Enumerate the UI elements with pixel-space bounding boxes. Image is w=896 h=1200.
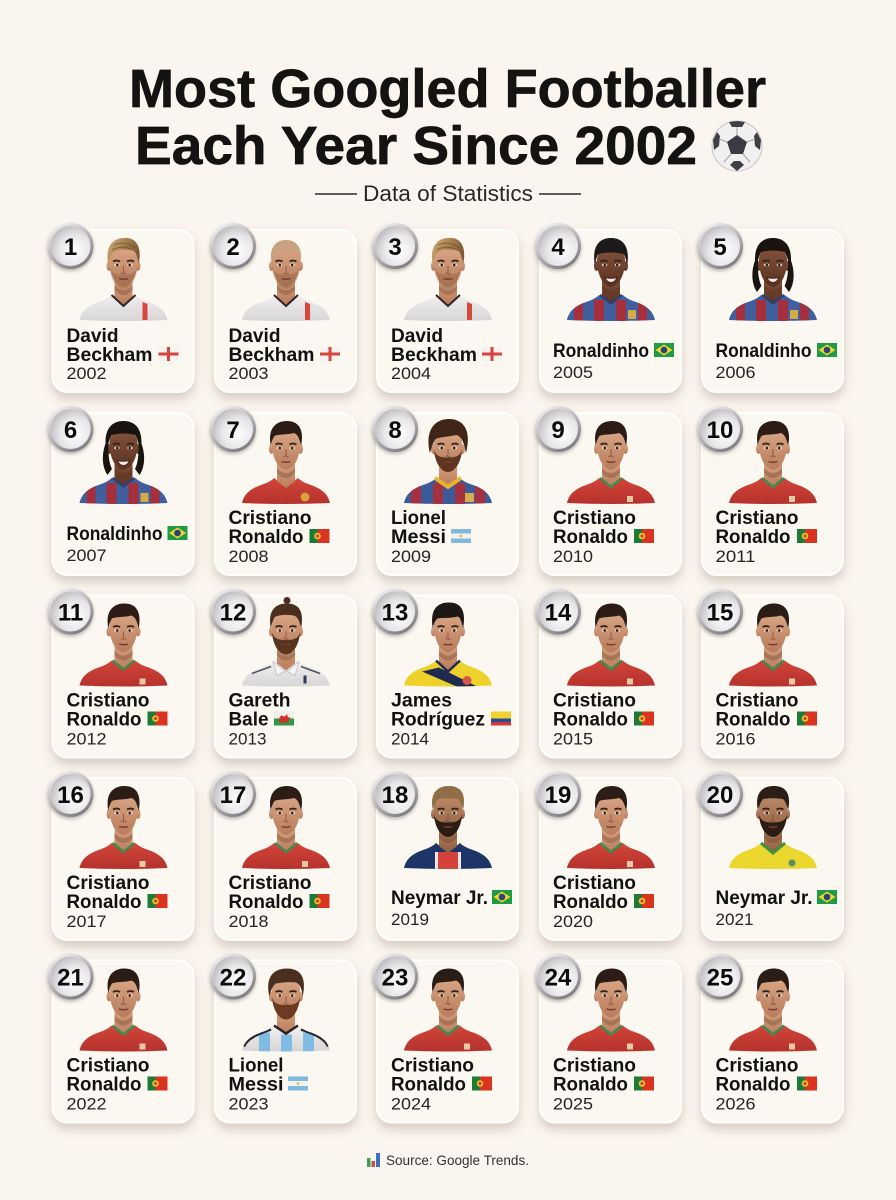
rank badge (372, 588, 418, 634)
card 9: Cristiano Ronaldo 2010 (535, 406, 681, 575)
flag: Brazil (168, 526, 188, 540)
year: 2022 (66, 1094, 106, 1114)
year: 2003 (228, 364, 268, 383)
flag: Portugal (634, 712, 654, 726)
card 11: Cristiano Ronaldo 2012 (48, 588, 194, 758)
title: Most Googled Footballer (129, 59, 766, 119)
name: Neymar Jr. (716, 887, 812, 909)
portrait (404, 602, 492, 688)
flag: Portugal (148, 1076, 168, 1090)
rank badge: 16 (57, 782, 84, 809)
flag: England (320, 347, 340, 361)
card 25: Cristiano Ronaldo 2026 (697, 954, 843, 1122)
year: 2014 (391, 730, 429, 748)
name: David (66, 325, 118, 347)
rank badge (697, 771, 743, 817)
rank badge (535, 954, 581, 1000)
name: Lionel (391, 507, 446, 529)
year: 2007 (66, 546, 106, 565)
name (228, 872, 312, 913)
rank badge: 11 (58, 600, 83, 626)
name: Ronaldo (66, 708, 142, 730)
rank badge: 4 (551, 234, 565, 261)
rank badge (48, 223, 94, 269)
name (716, 1054, 799, 1096)
rank badge: 9 (551, 417, 565, 444)
flag: England (482, 347, 502, 361)
icon: bar chart (367, 1153, 380, 1167)
portrait (567, 786, 655, 869)
portrait (729, 786, 817, 869)
year: 2002 (66, 364, 106, 383)
name: Ronaldo (553, 708, 628, 730)
year: 2005 (553, 363, 593, 382)
name (66, 1054, 150, 1096)
rank badge: 24 (545, 964, 572, 992)
rank badge (48, 406, 94, 452)
rank badge: 6 (64, 417, 77, 444)
flag: Portugal (797, 712, 817, 726)
name (391, 507, 446, 548)
rank badge (372, 223, 418, 269)
year: 2019 (391, 910, 429, 929)
name: David (228, 325, 280, 347)
name: Rodríguez (391, 708, 485, 730)
name (391, 690, 485, 730)
card 22: Lionel Messi 2023 (210, 954, 356, 1122)
portrait (567, 968, 655, 1052)
name: Cristiano (228, 872, 312, 894)
year: 2010 (553, 547, 593, 566)
card 12: Gareth Bale 2013 (210, 588, 356, 758)
flag: Colombia (491, 712, 511, 726)
rank badge: 25 (707, 964, 733, 992)
name: Ronaldinho (553, 340, 649, 362)
name: Neymar Jr. (391, 887, 488, 909)
rank badge: 18 (382, 782, 408, 809)
year: 2016 (716, 730, 756, 748)
year: 2020 (553, 912, 593, 931)
rank badge: 12 (220, 600, 246, 626)
year: 2026 (716, 1094, 756, 1114)
portrait (242, 597, 330, 686)
rank badge (210, 223, 256, 269)
year: 2006 (716, 363, 756, 382)
card 10: Cristiano Ronaldo 2011 (697, 406, 843, 575)
flag: Argentina (288, 1076, 308, 1090)
name: Lionel (228, 1054, 284, 1076)
rank badge: 17 (220, 782, 246, 809)
card 15: Cristiano Ronaldo 2016 (697, 588, 843, 758)
name (553, 690, 636, 730)
portrait (242, 968, 330, 1054)
name (66, 872, 150, 913)
name: Ronaldo (228, 526, 304, 548)
card 17: Cristiano Ronaldo 2018 (210, 771, 356, 940)
name: Ronaldo (391, 1074, 466, 1096)
card 1: David Beckham 2002 (48, 223, 194, 392)
year: 2009 (391, 547, 431, 566)
name: Cristiano (66, 690, 150, 712)
portrait (729, 421, 817, 504)
rank badge (210, 954, 256, 1000)
name: Cristiano (391, 1054, 474, 1076)
name: Cristiano (553, 690, 636, 712)
portrait (404, 238, 492, 321)
name (66, 690, 150, 730)
portrait (242, 421, 330, 504)
name: Cristiano (553, 872, 636, 894)
rank badge (372, 771, 418, 817)
rank badge: 20 (707, 782, 733, 809)
portrait (567, 238, 655, 324)
name (553, 1054, 636, 1096)
name (716, 507, 799, 548)
rank badge (535, 406, 581, 452)
card 2: David Beckham 2003 (210, 223, 356, 392)
flag: Portugal (634, 894, 654, 908)
rank badge (210, 406, 256, 452)
card 23: Cristiano Ronaldo 2024 (372, 954, 518, 1122)
card 21: Cristiano Ronaldo 2022 (48, 954, 194, 1122)
card 6: Ronaldinho 2007 (48, 406, 194, 575)
rank badge (535, 223, 581, 269)
rank badge (697, 588, 743, 634)
year: 2021 (716, 910, 754, 929)
subtitle: Data of Statistics (363, 181, 533, 206)
card 14: Cristiano Ronaldo 2015 (535, 588, 681, 758)
flag: Portugal (472, 1076, 492, 1090)
name: Ronaldo (553, 526, 628, 548)
name: Ronaldo (66, 891, 142, 913)
portrait (567, 421, 655, 504)
portrait (80, 604, 168, 686)
card 19: Cristiano Ronaldo 2020 (535, 771, 681, 940)
rank badge: 3 (388, 234, 402, 261)
name: David (391, 325, 443, 347)
name: Beckham (66, 344, 152, 366)
rank badge: 22 (220, 964, 246, 992)
portrait (80, 238, 168, 321)
portrait (567, 604, 655, 686)
card 7: Cristiano Ronaldo 2008 (210, 406, 356, 575)
rank badge: 2 (226, 234, 240, 261)
rank badge (697, 223, 743, 269)
flag: Argentina (451, 529, 471, 543)
name: Cristiano (553, 507, 636, 529)
name: Gareth (228, 690, 290, 712)
name: Bale (228, 708, 269, 730)
rank badge: 10 (707, 417, 733, 444)
card 20: Neymar Jr. 2021 (697, 771, 843, 940)
name: Ronaldo (553, 891, 628, 913)
year: 2018 (228, 912, 268, 931)
portrait (729, 604, 817, 686)
flag: Brazil (492, 890, 512, 904)
name: Messi (391, 526, 446, 548)
name: Cristiano (66, 872, 150, 894)
portrait (242, 786, 330, 869)
card 4: Ronaldinho 2005 (535, 223, 681, 392)
name (228, 507, 312, 548)
name (391, 325, 477, 366)
card 24: Cristiano Ronaldo 2025 (535, 954, 681, 1122)
rank badge: 13 (382, 600, 408, 626)
name: Ronaldo (716, 1074, 791, 1096)
portrait (80, 968, 168, 1052)
rank badge: 15 (707, 600, 733, 626)
year: 2015 (553, 730, 593, 748)
name: Beckham (391, 344, 477, 366)
year: 2023 (228, 1094, 268, 1114)
flag: Portugal (634, 1076, 654, 1090)
name: Ronaldinho (66, 523, 163, 545)
card 8: Lionel Messi 2009 (372, 406, 518, 575)
name: James (391, 690, 452, 712)
name (553, 507, 636, 548)
portrait (80, 421, 168, 507)
year: 2008 (228, 547, 268, 566)
portrait (80, 786, 168, 869)
name: Cristiano (228, 507, 312, 529)
year: 2004 (391, 364, 431, 383)
card 18: Neymar Jr. 2019 (372, 771, 518, 940)
name: Cristiano (66, 1054, 150, 1076)
name: Ronaldo (716, 526, 791, 548)
year: 2012 (66, 730, 106, 748)
rank badge (535, 771, 581, 817)
flag: Brazil (817, 890, 837, 904)
rank badge (372, 406, 418, 452)
name: Ronaldo (228, 891, 304, 913)
name: Beckham (228, 344, 314, 366)
card 5: Ronaldinho 2006 (697, 223, 843, 392)
flag: Wales (274, 712, 294, 726)
card 13: James Rodríguez 2014 (372, 588, 518, 758)
rank badge (697, 406, 743, 452)
portrait (404, 419, 492, 507)
card 16: Cristiano Ronaldo 2017 (48, 771, 194, 940)
name: Ronaldinho (716, 340, 812, 362)
portrait (404, 968, 492, 1052)
name (228, 690, 290, 730)
flag: Portugal (634, 529, 654, 543)
icon: football (712, 121, 762, 171)
rank badge (535, 588, 581, 634)
name (391, 1054, 474, 1096)
portrait (404, 786, 492, 872)
year: 2011 (716, 547, 756, 566)
name: Cristiano (553, 1054, 636, 1076)
name: Messi (228, 1074, 284, 1096)
rank badge: 14 (545, 600, 572, 626)
flag: Brazil (654, 343, 674, 357)
flag: Portugal (148, 894, 168, 908)
flag: England (158, 347, 178, 361)
card 3: David Beckham 2004 (372, 223, 518, 392)
rank badge: 1 (64, 234, 77, 261)
year: 2025 (553, 1094, 593, 1114)
flag: Portugal (148, 712, 168, 726)
name (228, 1054, 284, 1096)
source line: Source: Google Trends. (386, 1152, 529, 1168)
rank badge: 7 (226, 417, 240, 444)
title (129, 59, 766, 176)
portrait (729, 968, 817, 1052)
title: Each Year Since 2002 (135, 116, 697, 176)
flag: Portugal (310, 894, 330, 908)
flag: Brazil (817, 343, 837, 357)
name (228, 325, 314, 366)
rank badge: 8 (388, 417, 402, 444)
flag: Portugal (797, 529, 817, 543)
name: Cristiano (716, 507, 799, 529)
year: 2013 (228, 730, 266, 748)
rank badge: 5 (713, 234, 727, 261)
rank badge (210, 588, 256, 634)
name: Cristiano (716, 690, 799, 712)
name: Ronaldo (66, 1074, 142, 1096)
rank badge: 21 (57, 964, 84, 992)
rank badge (210, 771, 256, 817)
rank badge (48, 588, 94, 634)
rank badge (372, 954, 418, 1000)
name: Ronaldo (553, 1074, 628, 1096)
flag: Portugal (797, 1076, 817, 1090)
rank badge: 23 (382, 964, 408, 992)
portrait (242, 240, 330, 321)
year: 2017 (66, 912, 106, 931)
name (716, 690, 799, 730)
name: Ronaldo (716, 708, 791, 730)
name (66, 325, 152, 366)
rank badge (697, 954, 743, 1000)
rank badge: 19 (545, 782, 571, 809)
name: Cristiano (716, 1054, 799, 1076)
rank badge (48, 771, 94, 817)
rank badge (48, 954, 94, 1000)
name (553, 872, 636, 913)
year: 2024 (391, 1094, 431, 1114)
flag: Portugal (310, 529, 330, 543)
portrait (729, 238, 817, 324)
